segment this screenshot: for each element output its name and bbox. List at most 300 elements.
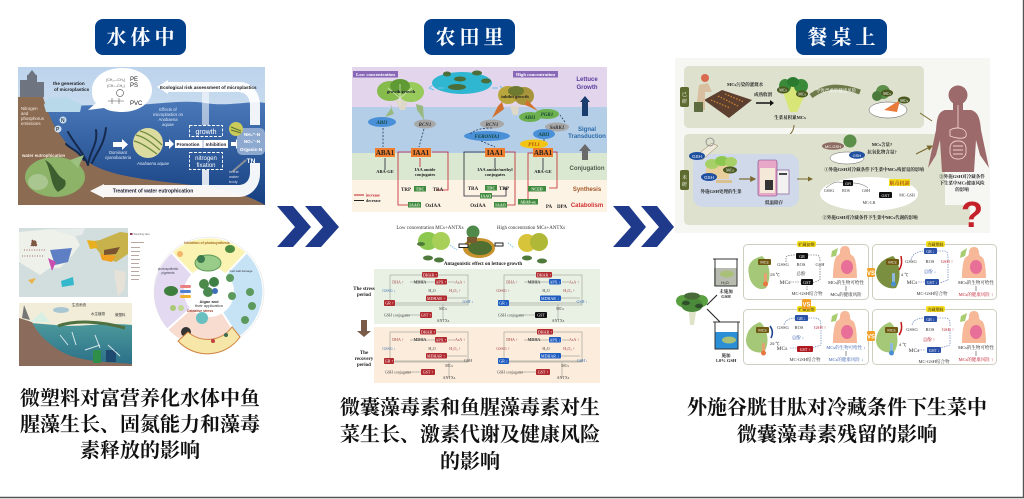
- arrow: chevrons one: [277, 206, 339, 247]
- icon: human body: [928, 86, 989, 172]
- text labels: Ecological risk assessment of microplastics: [160, 85, 257, 90]
- pathway: recovery low: GSH conjugates: [385, 370, 411, 374]
- panel: microplastics and eutrophication diagram: water eutrophication: [21, 153, 65, 158]
- panel: microplastics and eutrophication diagram: Anabaena: [158, 117, 178, 122]
- hormone boxes: ABA1: [376, 149, 395, 157]
- panel: microplastics and eutrophication diagram: phosphorus: [21, 116, 45, 121]
- beaker: GSH: 1.0% GSH: [716, 358, 737, 363]
- panel: cold GSH: GSH ↑: [942, 327, 954, 332]
- pathway: stress low: GSSG ↓: [382, 288, 396, 293]
- panel: algae circular review graphic: Cell wall damage: [230, 269, 253, 273]
- pathway: stress high: [496, 272, 588, 323]
- panel: cold GSH: MCs: [887, 328, 896, 332]
- panel: unknown: 研: [682, 181, 687, 188]
- speech bubble: polymers: PS: [130, 83, 138, 89]
- pathway nodes: ABI1: [375, 121, 388, 126]
- nitrogen forms: Organic-N: [240, 147, 263, 152]
- panel: cold no GSH: MCs的健康风险 ↑: [959, 291, 993, 298]
- detox mechanism: GR: [845, 181, 851, 186]
- pathway: stress high: H₂O₂ ↑: [563, 288, 575, 293]
- pathway: stress low: GR ↑: [385, 300, 394, 306]
- speech bubble: polymers: (CH—CH₂): [107, 84, 125, 88]
- branch arrows: [707, 295, 720, 322]
- lettuce: growth: growth growth: [387, 89, 416, 94]
- conjugation band: [352, 153, 607, 180]
- panel: cold no GSH: GSSG: [905, 259, 917, 264]
- N and P nutrient dots: P: [56, 127, 60, 133]
- N and P nutrient dots: [54, 116, 66, 133]
- recovery period label: [355, 351, 374, 368]
- pathway: recovery high: MDHAR ↓: [541, 354, 559, 358]
- up arrows: [579, 96, 591, 160]
- right side level labels: [568, 77, 606, 209]
- panel: room temp GSH: 贮藏初期: [798, 306, 814, 312]
- panel: cold no GSH: MCs: [888, 260, 897, 264]
- plate of vegetables: [869, 85, 910, 118]
- panel: room temp no GSH: MC-GSH结合物: [791, 290, 823, 297]
- farmer and field: [694, 74, 752, 118]
- pathway: recovery high: H₂O₂ ↑: [563, 346, 575, 351]
- recovery period label: The: [360, 351, 369, 356]
- panel: lake schematic: 水生植物: [91, 311, 105, 316]
- stress period label: period: [357, 293, 371, 298]
- lettuce with MCs: MCs: [798, 92, 806, 96]
- beaker: no GSH: 未施加: [719, 288, 733, 295]
- panel: cold no GSH: [872, 241, 996, 300]
- pathway: recovery high: GSH↓: [577, 358, 587, 363]
- heading: 农田里: [424, 19, 515, 55]
- synthesis and catabolism band: [352, 180, 607, 212]
- pathway: recovery high: GSSG ↑: [496, 346, 510, 351]
- pathway: stress low: DHAR ↑: [423, 272, 437, 278]
- caption: farmland: 菜生长、激素代谢及健康风险: [340, 422, 600, 446]
- panel: cold GSH: GSSG: [906, 327, 918, 332]
- panel: room temp GSH: MCs: [777, 346, 787, 352]
- pathway: stress high: AsA ↑: [569, 280, 579, 284]
- panel: room temp GSH: 25 ℃: [770, 341, 780, 346]
- panel: room temp no GSH: GST: [803, 280, 811, 285]
- panel: cold GSH: MCs: [909, 348, 919, 354]
- connecting arrows: [772, 113, 932, 144]
- panel: unknown: 未: [682, 174, 687, 181]
- spray bottle: GSH: [692, 154, 702, 159]
- pathway: recovery low: H₂O: [428, 346, 436, 351]
- pathway: stress low: H₂O: [428, 288, 436, 293]
- pathway: recovery high: GR ↓: [499, 358, 508, 364]
- caption: water: 腥藻生长、固氮能力和藻毒: [20, 413, 260, 436]
- growth box: [190, 126, 222, 136]
- stress period label: The stress: [353, 287, 375, 292]
- treated lettuce: [701, 156, 737, 183]
- panel: known: 生菜易积累MCs: [774, 114, 806, 121]
- pathway: recovery high: MDHA: [528, 337, 540, 342]
- panel: room temp GSH: MC-GSH结合物: [789, 356, 821, 363]
- beaker: GSH: [713, 322, 740, 363]
- pathway: recovery low: [382, 329, 472, 380]
- panel: room temp GSH: GST ↑: [800, 347, 810, 352]
- conjugation labels: [376, 167, 552, 177]
- detox mechanism: MC-LR: [863, 200, 876, 205]
- hormone boxes: IAA1: [487, 149, 504, 157]
- pathway: stress high: MCs: [556, 306, 564, 311]
- pathway: stress low: MDHA: [414, 280, 426, 284]
- treatment label: Treatment of water eutrophication: [113, 188, 193, 194]
- caption: farmland: [340, 395, 600, 473]
- lettuce: growth: [377, 79, 424, 110]
- panel: room temp no GSH: 贮藏初期: [798, 241, 814, 247]
- panel: room temp GSH: 总酚 ↓: [792, 334, 804, 341]
- panel: room temp GSH: MCs的健康风险 ↓: [829, 356, 863, 363]
- panel: unknown: [680, 134, 970, 225]
- speech bubble: polymers: PE: [130, 77, 138, 83]
- pathway nodes: SnRK1: [550, 126, 564, 131]
- panel: unknown: MCs含量?: [872, 141, 892, 148]
- panel: room temp GSH: MCs: [758, 328, 767, 332]
- panel: microplastics and eutrophication diagram: microplastics on: [153, 112, 184, 117]
- nitrogen forms: TN: [247, 158, 256, 165]
- text labels: [53, 81, 257, 92]
- panel: algae circular review graphic: [154, 237, 264, 354]
- right side level labels: Signal: [578, 127, 596, 133]
- panel: cold GSH: 总酚 ↑: [923, 336, 935, 343]
- pathway nodes: ABI1: [523, 116, 536, 121]
- growth box: growth: [195, 129, 217, 136]
- lettuce sample: [676, 292, 708, 325]
- metabolism green boxes: TRA: [468, 187, 479, 192]
- caption: water: [20, 386, 260, 462]
- pathway: stress high: GSH ↓: [576, 299, 588, 304]
- nitrogen forms: NH₄⁺-N: [244, 132, 261, 137]
- pathway: stress high: DHAR ↑: [537, 272, 551, 278]
- pathway: recovery low: GST ↑: [423, 370, 433, 374]
- panel: algae circular review graphic: pigments: [162, 271, 175, 275]
- pathway: recovery high: DHA ↑: [506, 337, 518, 342]
- conjugation labels: ABA-GE: [534, 169, 552, 174]
- flow arrows: [113, 139, 241, 150]
- panel: room temp no GSH: MCs的健康风险: [830, 291, 862, 298]
- lettuce with MCs: [777, 77, 808, 112]
- panel: microplastics and eutrophication diagram: aquae: [162, 122, 174, 127]
- plate of vegetables: MCs: [883, 91, 891, 96]
- right side level labels: Lettuce: [576, 77, 598, 83]
- pathway: stress low: MDHAR ↑: [427, 296, 445, 301]
- panel: unknown: 外施GSH处理的生菜: [700, 188, 742, 195]
- lettuce with MCs: MCs: [779, 88, 787, 92]
- pathway: stress low: APX ↑: [435, 280, 447, 284]
- nitrogen forms: NO₃⁻-N: [244, 139, 261, 144]
- panel: known: 研: [682, 98, 687, 105]
- pathway nodes: [368, 109, 569, 148]
- panel: algae circular review graphic: Inhibition of photosynthesis: [184, 241, 230, 245]
- nitrogen fixation box: nitrogen: [195, 156, 217, 162]
- pathway: stress low: [382, 272, 474, 323]
- panel: cold GSH: GR ↓: [926, 317, 935, 322]
- right side level labels: Conjugation: [570, 166, 605, 172]
- water body: [18, 102, 265, 205]
- body risk note: 下生菜中MCs健康风险: [939, 180, 985, 186]
- pathway nodes: RCN1: [419, 123, 431, 128]
- pathway lines: [383, 115, 565, 205]
- refrigerator: [758, 160, 789, 206]
- concentration tags: [353, 71, 558, 78]
- panel: algae circular review graphic: Oxidative stress: [187, 309, 213, 313]
- beaker: GSH: 施加: [722, 352, 731, 359]
- panel: microplastics and eutrophication diagram: [18, 67, 265, 205]
- concentration tags: Low concentration: [356, 72, 395, 77]
- pathway: stress high: ANTXs: [552, 318, 565, 323]
- pathway: recovery high: GSH conjugates: [497, 370, 523, 374]
- pathway nodes: PYL1: [528, 143, 540, 148]
- conjugation labels: ABA-GE: [376, 169, 394, 174]
- pathway: recovery low: GR ↑: [385, 358, 393, 364]
- pathway: stress low: AsA ↑: [455, 280, 465, 284]
- pathway: recovery low: AsA ↑: [455, 337, 465, 342]
- panel: antagonistic illustration: Low concentration MCs+ANTXs: [396, 226, 464, 231]
- speech bubble: polymers: PVC: [130, 101, 143, 107]
- pathway nodes: ABI1: [537, 133, 550, 138]
- detox mechanism: [820, 177, 918, 211]
- heading: 农田里: 农田里: [434, 26, 508, 49]
- pathway: stress low: GSH conjugates: [384, 312, 410, 318]
- text labels: of microplastics: [54, 87, 90, 92]
- caption: farmland: 微囊藻毒素和鱼腥藻毒素对生: [340, 395, 600, 419]
- label: food chain: [811, 87, 860, 96]
- nitrogen forms: in the: [229, 169, 240, 174]
- promotion inhibition box: [175, 140, 228, 148]
- panel: room temp no GSH: 总酚: [796, 270, 806, 277]
- conjugation labels: IAA amide: [415, 167, 435, 172]
- detox mechanism: ROS: [842, 188, 850, 193]
- arrow: down to recovery: [357, 320, 371, 337]
- panel: cold no GSH: MCs: [907, 280, 917, 286]
- pathway: stress high: GST: [537, 312, 545, 318]
- speech bubble: polymers: [88, 68, 152, 112]
- pathway: stress low: MCs: [439, 306, 447, 311]
- panel: known: 成熟收割: [754, 91, 772, 98]
- VS badges: VS: [867, 334, 875, 340]
- promotion inhibition box: Promotion: [177, 142, 200, 147]
- VS badges: [802, 268, 875, 341]
- increase and decrease legend: increase: [366, 192, 380, 198]
- body risk note: 的影响: [955, 186, 969, 193]
- pathway: recovery low: DHA ↑: [392, 337, 404, 342]
- lettuce: inhibited: [498, 86, 534, 115]
- VS badges: VS: [867, 271, 875, 277]
- beaker: no GSH: GSH: [721, 294, 731, 299]
- panel: cold GSH: 4 ℃: [899, 342, 906, 347]
- microplastic waves: [44, 97, 82, 112]
- signal transduction band: [352, 107, 607, 153]
- text labels: the generation: [53, 81, 85, 86]
- panel: room temp GSH: ROS: [795, 325, 804, 330]
- recovery period label: recovery: [355, 357, 374, 362]
- panel: cold no GSH: MCs的生物可给性: [958, 279, 994, 286]
- pathway: recovery high: MCs: [561, 363, 569, 368]
- metabolism green boxes: ABA8-ox: [520, 200, 536, 204]
- panel: room temp GSH: GR ↓: [797, 316, 806, 321]
- panel: room temp GSH: GSSG: [777, 325, 789, 330]
- pathway nodes: RCN1: [486, 123, 498, 128]
- pathway: stress low: GST ↑: [421, 312, 431, 318]
- panel: cold no GSH: MC-GSH结合物: [916, 290, 948, 297]
- panel: microplastics and eutrophication diagram: Nitrogen: [21, 106, 38, 111]
- body risk note: [939, 173, 985, 193]
- pathway: recovery high: AsA ↑: [569, 337, 579, 342]
- pathway: stress high: DHA ↑: [506, 280, 518, 284]
- panel: lake schematic: 微塑料: [115, 312, 126, 317]
- panel: microplastics and eutrophication diagram: and: [21, 111, 29, 116]
- pathway: stress high: GSSG ↑: [496, 288, 510, 293]
- pathway: recovery low: ANTXs: [443, 375, 456, 380]
- panel: room temp GSH: [744, 306, 868, 364]
- pathway: recovery low: MDHAR ↑: [427, 354, 445, 358]
- metabolism green boxes: NCED: [531, 186, 543, 192]
- metabolism green boxes: TRP: [499, 187, 509, 192]
- panel: microplastics and eutrophication diagram: Effects of: [159, 107, 178, 112]
- panel: cold GSH: 冷藏期间: [928, 306, 944, 312]
- caption: water: 微塑料对富营养化水体中鱼: [20, 386, 260, 410]
- metabolism green boxes: IAAO: [481, 194, 491, 198]
- pathway: stress low: DHA ↑: [392, 280, 404, 284]
- panel: cold no GSH: GSH ↑: [941, 259, 953, 264]
- panel: room temp no GSH: MCs: [780, 280, 790, 286]
- icon: question mark: ?: [961, 194, 983, 235]
- algae bloom: [25, 155, 85, 197]
- pathway: recovery high: [496, 329, 587, 380]
- panel: lake schematic: [19, 302, 132, 366]
- panel: cold GSH: MCs的生物可给性: [958, 344, 994, 351]
- panel: table research framework: [675, 58, 990, 235]
- detox mechanism: GSH: [862, 188, 870, 193]
- panel: room temp no GSH: MCs: [760, 260, 769, 264]
- metabolism green boxes: PA: [546, 205, 553, 210]
- treated lettuce: GSH: [704, 175, 714, 180]
- central algae: [184, 267, 234, 317]
- nitrogen forms: water: [229, 174, 239, 179]
- heading: 水体中: [95, 19, 186, 55]
- metabolism green boxes: TRP: [401, 188, 411, 193]
- lettuce: inhibited: inhibit growth: [501, 94, 529, 99]
- increase and decrease legend: decrease: [366, 198, 381, 203]
- plate with GSH: GSH: [853, 153, 861, 158]
- panel: cold no GSH: ROS: [926, 259, 935, 264]
- metabolism green boxes: TDC: [487, 186, 495, 190]
- treatment zone: [693, 154, 799, 207]
- right side level labels: Growth: [576, 85, 598, 91]
- pathway: recovery high: ANTXs: [557, 375, 570, 380]
- pathway: recovery high: APX ↓: [549, 338, 561, 342]
- anabaena cell: [133, 128, 163, 158]
- heading: 水体中: 水体中: [106, 26, 178, 49]
- body risk note: ③外施GSH对冷藏条件: [939, 173, 985, 180]
- spray bottle: [689, 138, 718, 160]
- conjugation labels: conjugates: [415, 172, 435, 177]
- pathway: recovery low: DHAR ↑: [421, 330, 435, 334]
- city skyline: [20, 70, 44, 97]
- conjugation labels: conjugates: [485, 172, 505, 177]
- pathway: recovery low: MDHA: [414, 337, 426, 342]
- panel: microplastics and eutrophication diagram: Anabaena aquae: [136, 161, 170, 166]
- panel: unknown: 抗氧化物含量?: [867, 148, 897, 156]
- caption: table: [687, 395, 987, 446]
- pathway: stress high: GSH conjugates: [498, 312, 524, 318]
- panel: cold GSH: [872, 306, 996, 365]
- right side level labels: Transduction: [568, 134, 606, 140]
- plate with GSH: [822, 134, 865, 164]
- right side level labels: Synthesis: [573, 187, 602, 193]
- arrow: chevrons two: [613, 206, 674, 247]
- beaker: no GSH: H₂O: [721, 280, 729, 285]
- lettuce growth band: [352, 67, 607, 107]
- N and P nutrient dots: N: [61, 118, 65, 124]
- panel: room temp no GSH: GSSG: [777, 262, 789, 267]
- panel: lake schematic: 生态系统: [72, 302, 86, 307]
- panel: cold no GSH: GR ↓: [926, 249, 935, 254]
- metabolism green boxes: IAAO: [495, 202, 506, 208]
- panel: known: 已: [682, 91, 687, 98]
- nitrogen fixation box: fixation: [196, 163, 216, 169]
- pathway: recovery low: GSSG ↓: [382, 346, 396, 351]
- pathway: recovery low: GSH: [464, 358, 472, 363]
- right side level labels: Catabolism: [571, 203, 603, 209]
- pathway: recovery low: H₂O₂ ↑: [449, 346, 461, 351]
- stress period label: [353, 287, 375, 298]
- growth arrows: [385, 100, 538, 120]
- ecological risk arrow: [157, 80, 260, 125]
- panel: room temp GSH: MCs的生物可给性 ↓: [826, 344, 866, 351]
- panel: unknown: ②外施GSH对冷藏条件下生菜中MCs代谢的影响: [822, 214, 918, 221]
- metabolism green boxes: OxIAA: [470, 204, 486, 209]
- seaweed: [66, 128, 106, 165]
- pathway: stress high: GR ↓: [499, 300, 508, 306]
- VS badges: VS: [802, 302, 811, 308]
- hormone boxes: IAA1: [413, 149, 430, 157]
- panel: microplastics and eutrophication diagram: emissions: [21, 121, 41, 126]
- map: world distribution: [19, 228, 128, 297]
- central algae: their application: [195, 303, 223, 308]
- detox mechanism: GST: [881, 193, 890, 198]
- panel: room temp no GSH: 25 ℃: [770, 272, 780, 277]
- panel: unknown: ①外施GSH对冷藏条件下生菜中MCs残留量的影响: [824, 166, 924, 173]
- speech bubble: polymers: (CH₂—CH₂): [106, 78, 125, 82]
- nitrogen fixation box: [190, 152, 222, 170]
- panel: antagonistic illustration: High concentration MCs+ANTXs: [497, 226, 565, 231]
- map legend: [130, 233, 151, 280]
- pathway: recovery low: APX ↑: [435, 338, 447, 342]
- pathway: stress high: H₂O: [542, 288, 550, 293]
- panel: cold no GSH: GST ↓: [927, 280, 937, 285]
- panel: room temp no GSH: GR: [799, 254, 805, 259]
- treated lettuce: MCs: [726, 168, 734, 172]
- panel: microplastics and eutrophication diagram: cyanobacteria: [105, 155, 132, 160]
- pathway: stress high: APX ↓: [549, 280, 561, 284]
- metabolism green boxes: TDC: [416, 186, 424, 192]
- ground: [18, 97, 265, 205]
- recovery period label: period: [357, 363, 371, 368]
- pathway: stress low: GSH ↓: [462, 299, 474, 304]
- refrigerator: 低温储存: [765, 199, 783, 206]
- pathway: stress low: H₂O₂ ↑: [449, 288, 461, 293]
- panel: cold no GSH: 冷藏期间: [928, 241, 944, 247]
- panel: room temp no GSH: [744, 241, 868, 300]
- panel: algae circular review graphic: photosynthetic: [158, 267, 179, 271]
- pathway: recovery high: DHAR ↑: [538, 330, 552, 334]
- metabolism green boxes: DPA: [557, 205, 567, 210]
- panel: cold GSH: MCs的健康风险 ↑: [959, 356, 993, 363]
- pathway: recovery high: GST ↑: [538, 370, 548, 374]
- panel: room temp no GSH: GSH: [815, 262, 825, 267]
- pond: [429, 70, 504, 94]
